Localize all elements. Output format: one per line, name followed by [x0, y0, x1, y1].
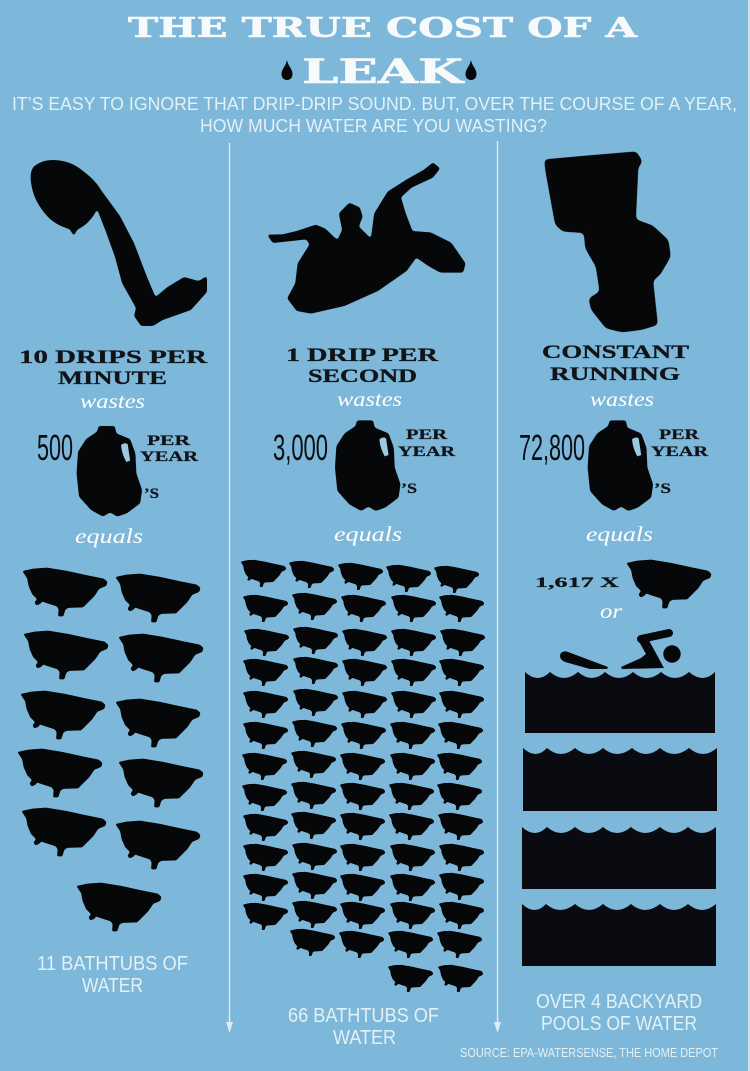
stat: 72,800 jugs per year	[519, 420, 708, 511]
pool 2	[523, 748, 717, 811]
icon: shower head	[31, 160, 207, 326]
stat: 500 jugs per year	[37, 426, 198, 517]
stat: 1,617 x bathtub	[535, 560, 711, 608]
pool 3	[522, 827, 716, 889]
icon: faucet	[267, 162, 466, 314]
stat: 72,800 jugs per year: 72,800	[519, 427, 585, 468]
heading: 1 drip per second: SECOND	[308, 366, 417, 387]
icons: 66 bathtubs	[241, 560, 485, 992]
caption: over 4 backyard pools of water: POOLS OF WATER	[541, 1013, 697, 1035]
stat: 72,800 jugs per year: ’S	[654, 481, 671, 497]
stat: 500 jugs per year: PER	[147, 433, 190, 449]
icon: right water drop	[466, 60, 476, 80]
intro text: HOW MUCH WATER ARE YOU WASTING?	[200, 115, 547, 136]
title: LEAK	[302, 52, 465, 92]
stat: 500 jugs per year: YEAR	[140, 449, 198, 465]
wastes labels: wastes	[590, 387, 654, 411]
icon: left water drop	[282, 60, 292, 80]
source: SOURCE: EPA-WATERSENSE, THE HOME DEPOT	[460, 1046, 718, 1060]
title: THE TRUE COST OF A	[128, 13, 639, 44]
heading: constant running: RUNNING	[550, 364, 680, 385]
pool 1	[525, 672, 715, 733]
caption: 66 bathtubs of water: WATER	[333, 1027, 396, 1049]
stat: 3,000 jugs per year: PER	[406, 427, 447, 443]
wastes labels: wastes	[80, 389, 145, 413]
equals labels: equals	[75, 524, 143, 548]
caption: 66 bathtubs of water	[288, 1005, 439, 1049]
wastes labels: wastes	[337, 387, 402, 411]
stat: 1,617 x bathtub: 1,617 X	[535, 575, 619, 591]
caption: 66 bathtubs of water: 66 BATHTUBS OF	[288, 1005, 439, 1027]
heading: 1 drip per second	[286, 345, 438, 387]
caption: 11 bathtubs of water: WATER	[82, 975, 143, 997]
caption: 11 bathtubs of water: 11 BATHTUBS OF	[37, 953, 188, 975]
caption: over 4 backyard pools of water: OVER 4 BACKYARD	[536, 991, 702, 1013]
stat: 500 jugs per year: 500	[37, 427, 73, 468]
caption: over 4 backyard pools of water	[536, 991, 702, 1035]
or label: or	[600, 599, 623, 623]
equals labels: equals	[586, 522, 653, 546]
stat: 500 jugs per year: ’S	[144, 486, 159, 502]
heading: 10 drips per minute	[19, 347, 207, 389]
icon: toilet	[544, 151, 671, 332]
stat: 3,000 jugs per year: 3,000	[273, 427, 328, 468]
stat: 3,000 jugs per year	[273, 420, 455, 511]
heading: 10 drips per minute: MINUTE	[58, 368, 167, 389]
stat: 72,800 jugs per year: YEAR	[651, 444, 708, 460]
stat: 72,800 jugs per year: PER	[659, 427, 699, 443]
icons: 11 bathtubs	[18, 568, 203, 931]
intro text: IT’S EASY TO IGNORE THAT DRIP-DRIP SOUND. BUT, OVER THE COURSE OF A YEAR,	[12, 93, 737, 114]
pool 4	[522, 904, 716, 966]
title	[128, 13, 639, 92]
equals labels	[75, 522, 653, 548]
icon: swimmer	[560, 633, 681, 669]
heading: 1 drip per second: 1 DRIP PER	[286, 345, 438, 366]
caption: 11 bathtubs of water	[37, 953, 188, 997]
heading: constant running: CONSTANT	[542, 342, 689, 363]
stat: 3,000 jugs per year: ’S	[401, 481, 417, 497]
heading: constant running	[542, 342, 689, 385]
arrow: divider between columns 1 and 2	[226, 143, 233, 1033]
heading: 10 drips per minute: 10 DRIPS PER	[19, 347, 207, 368]
stat: 3,000 jugs per year: YEAR	[398, 444, 455, 460]
arrow: divider between columns 2 and 3	[494, 141, 501, 1033]
equals labels: equals	[334, 522, 402, 546]
intro text	[12, 93, 737, 136]
wastes labels	[80, 387, 654, 413]
